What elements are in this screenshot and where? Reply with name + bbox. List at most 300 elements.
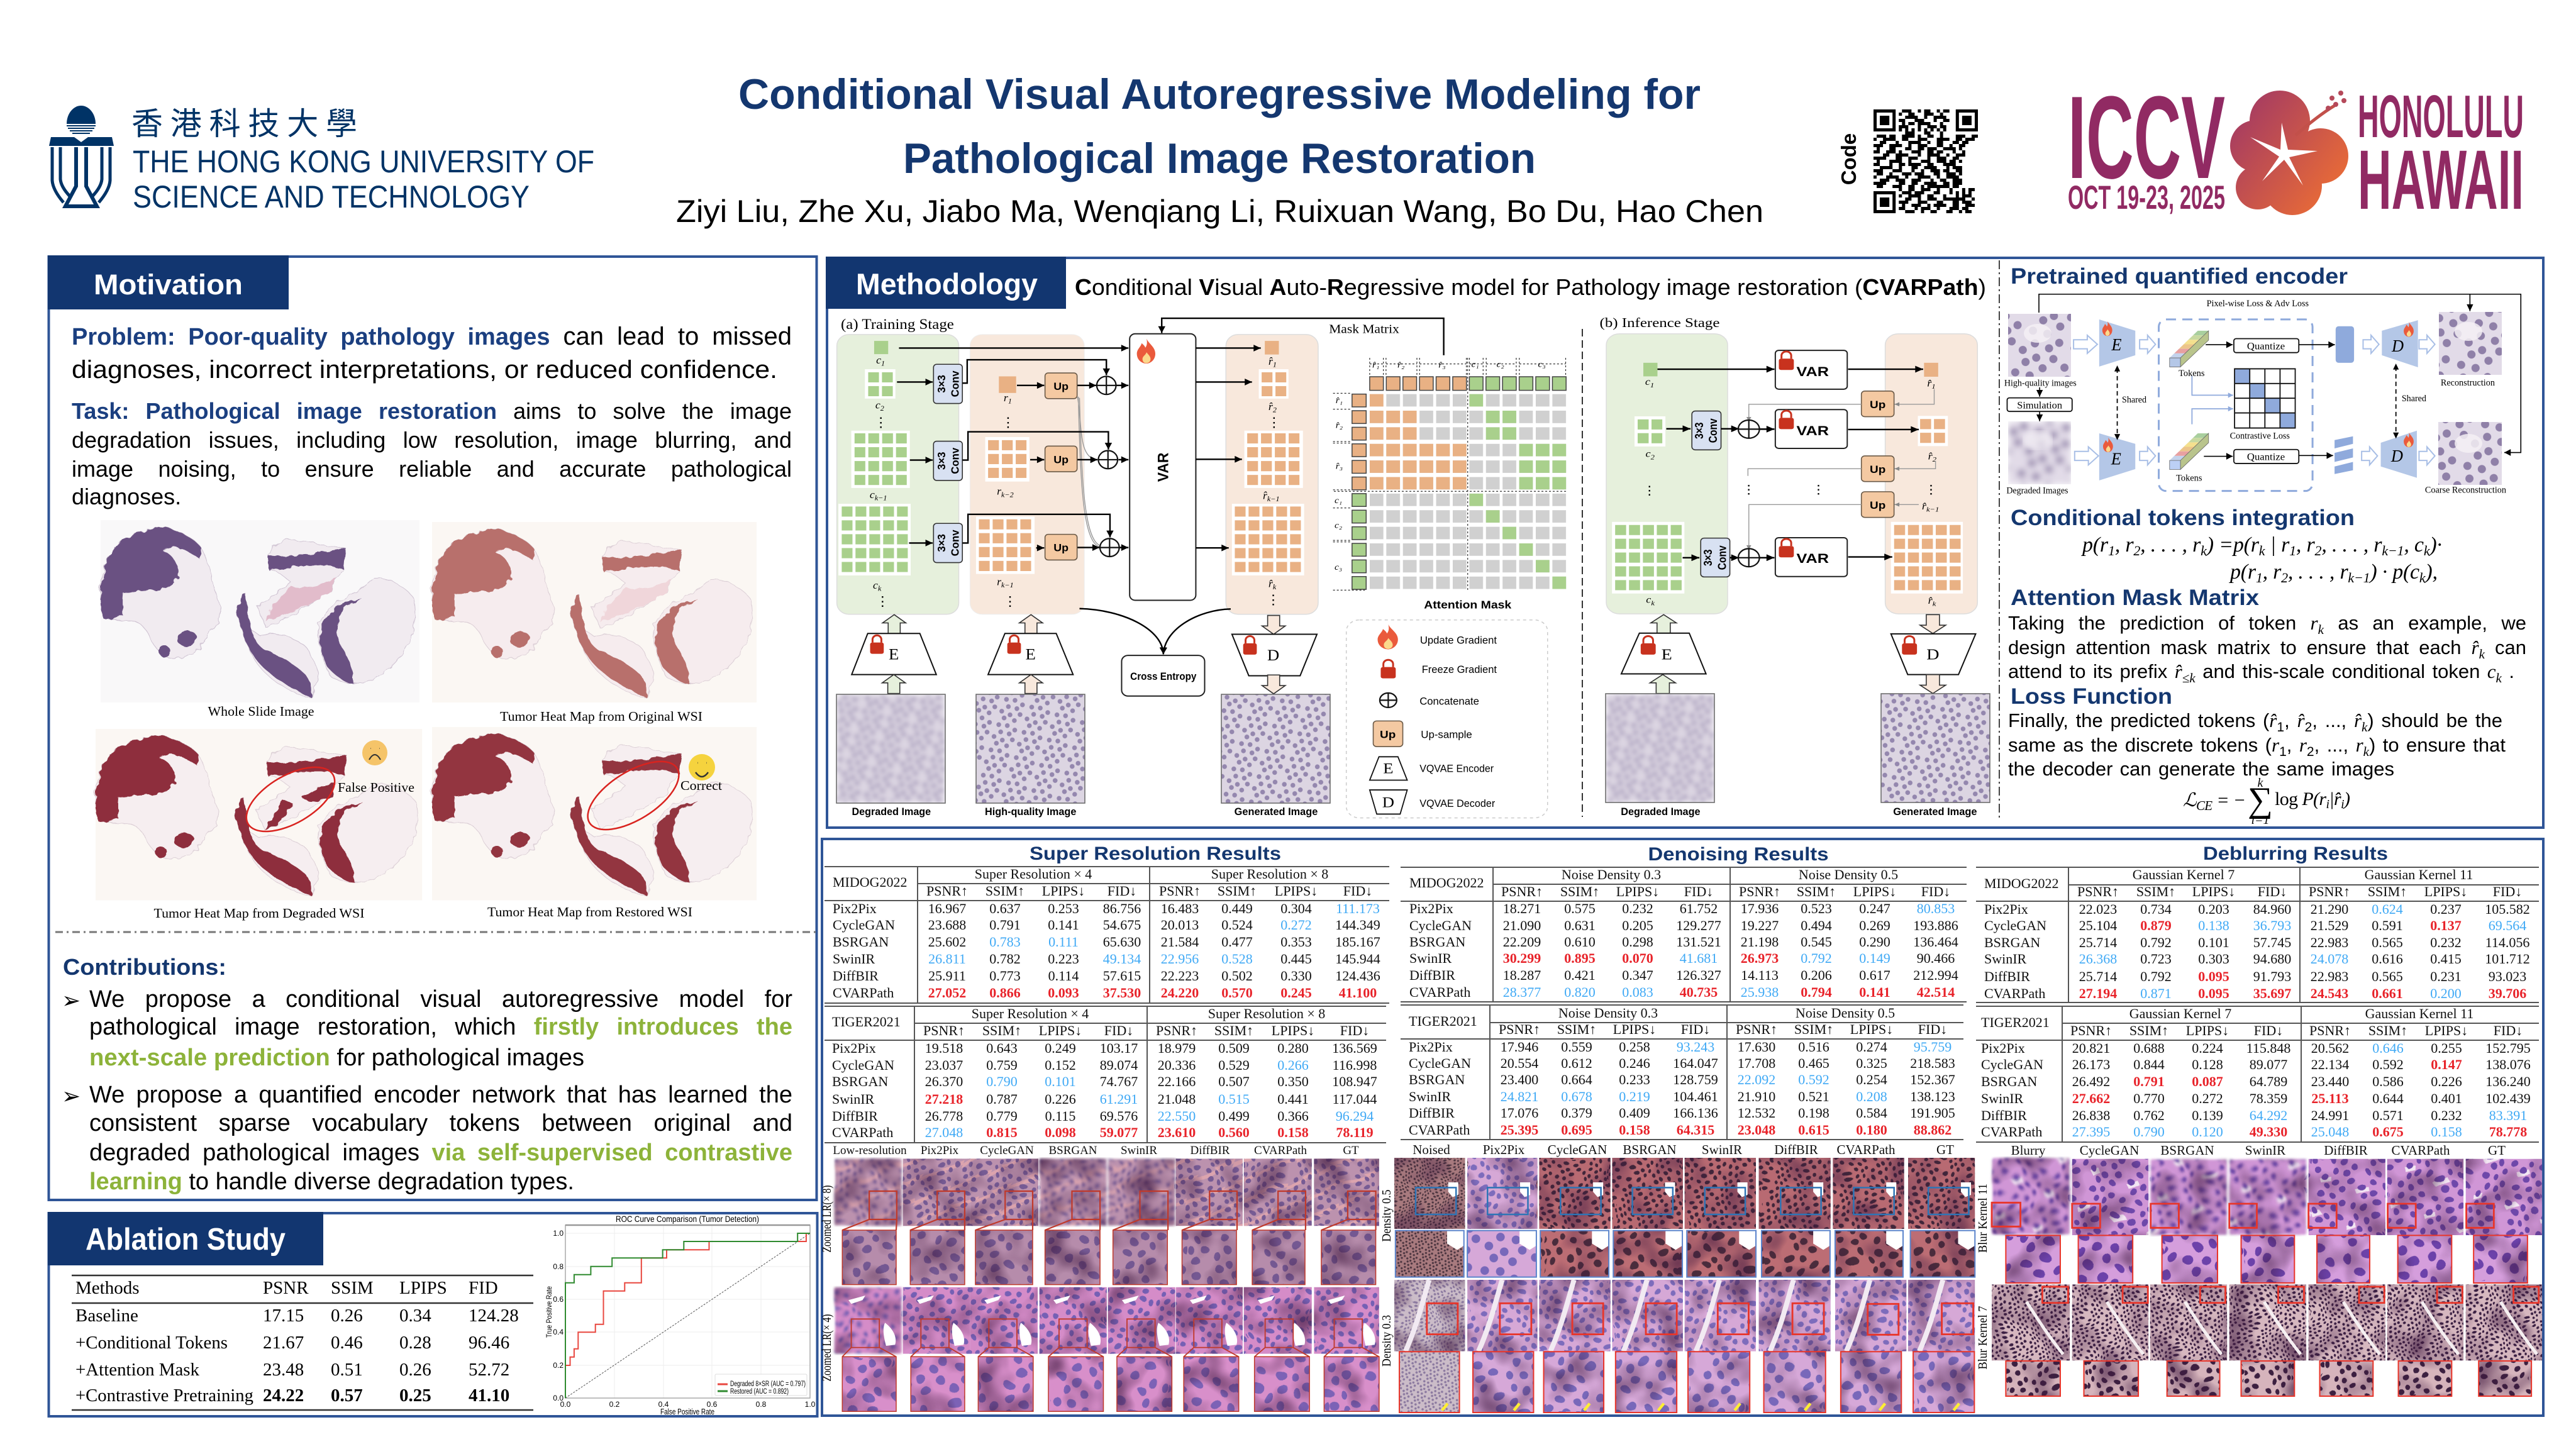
- equation: conditional factorization: 1: [2256, 570, 2263, 586]
- table: SR TIGER2021: BSRGAN: [832, 1074, 888, 1089]
- table: denoising TIGER2021: CVARPath: [1409, 1122, 1470, 1138]
- table: SR MIDOG2022: 25.602: [928, 934, 966, 950]
- diagram: pretrained encoder: Tokens: [2179, 369, 2205, 379]
- table: deblurring MIDOG2022: 36.793: [2253, 918, 2291, 933]
- captions: SR columns: [833, 1144, 1359, 1157]
- matrix cells: c₁: [1472, 360, 1479, 369]
- table: SR TIGER2021: 61.291: [1100, 1091, 1138, 1107]
- table: SR MIDOG2022: 27.052: [928, 985, 966, 1001]
- table: ablation results: LPIPS: [399, 1278, 447, 1298]
- side labels: image rows: Density 0.3: [1380, 1315, 1394, 1367]
- table: ablation results: Baseline: [75, 1306, 138, 1326]
- text: loss explanation: Finally, the predicted tokens (r̂1, r̂2, ..., r̂k) should be the: [2008, 709, 2502, 735]
- table: SR MIDOG2022: 26.811: [928, 951, 966, 967]
- chart: ROC curve comparison: 0.4: [553, 1328, 564, 1336]
- table: denoising MIDOG2022: SwinIR: [1409, 950, 1452, 966]
- table: SR MIDOG2022: SSIM↑: [985, 883, 1024, 899]
- table: SR MIDOG2022: 145.944: [1335, 951, 1380, 967]
- equation: conditional factorization: [2081, 533, 2442, 586]
- table: SR TIGER2021: 0.507: [1218, 1074, 1250, 1089]
- table: SR TIGER2021: 0.266: [1277, 1057, 1309, 1073]
- diagram: pretrained encoder: Pixel-wise Loss & Adv Loss: [2207, 299, 2309, 309]
- diagram: pretrained encoder: High-quality images: [2004, 378, 2077, 389]
- deblurring grid: kernel 7 highlight boxes: [2042, 1287, 2539, 1303]
- text: attention mask explanation: [2008, 611, 2526, 688]
- table: denoising TIGER2021: 0.254: [1856, 1072, 1887, 1087]
- panel: inference predicted tokens: k: [1933, 600, 1936, 608]
- captions: training images: [852, 806, 1318, 818]
- table: denoising MIDOG2022: CycleGAN: [1409, 918, 1472, 933]
- image: encoder high quality: [2008, 314, 2071, 377]
- table: SR MIDOG2022: 41.100: [1339, 985, 1377, 1001]
- table: denoising TIGER2021: 21.910: [1738, 1089, 1775, 1104]
- diagram: training stage: [837, 317, 1444, 818]
- table: deblurring MIDOG2022: 22.983: [2311, 935, 2348, 950]
- table: deblurring TIGER2021: 0.770: [2133, 1091, 2165, 1106]
- text: contribution 1: next-scale prediction for pathological images: [89, 1045, 584, 1071]
- blocks: 3x3 conv: Conv: [948, 370, 962, 397]
- deblurring grid: kernel 7 zoomed crops: [2006, 1361, 2531, 1396]
- panel: predicted tokens: r̂: [1263, 490, 1267, 501]
- panel: inference predicted tokens: r̂: [1922, 501, 1926, 512]
- table: denoising TIGER2021: BSRGAN: [1409, 1072, 1465, 1087]
- table: denoising MIDOG2022: 0.895: [1564, 950, 1596, 966]
- table: denoising TIGER2021: LPIPS↓: [1613, 1021, 1656, 1037]
- captions: denoising columns: DiffBIR: [1774, 1142, 1818, 1157]
- table: denoising TIGER2021: 0.208: [1856, 1089, 1887, 1104]
- table: deblurring TIGER2021: 25.113: [2311, 1091, 2349, 1106]
- matrix cells: r̂₁: [1336, 396, 1343, 406]
- diagram: pretrained encoder: Reconstruction: [2441, 378, 2496, 388]
- block: VAR transformer: VAR: [1155, 453, 1172, 482]
- table: deblurring MIDOG2022: 0.723: [2140, 951, 2172, 967]
- legend: [1346, 620, 1548, 818]
- table: SR MIDOG2022: 49.134: [1103, 951, 1141, 967]
- blocks: 3x3 conv: 3×3: [935, 375, 948, 393]
- table: SR TIGER2021: PSNR↑: [923, 1023, 965, 1038]
- captions: denoising columns: [1413, 1142, 1954, 1157]
- table: SR MIDOG2022: 25.911: [928, 968, 966, 984]
- decoder: [1891, 614, 1975, 694]
- table: deblurring TIGER2021: 25.048: [2311, 1124, 2349, 1140]
- chart: ROC curve comparison: Degraded 8×SR (AUC = 0.797): [730, 1380, 806, 1388]
- table: ablation results: 23.48: [263, 1360, 304, 1380]
- logo: HKUST: [49, 106, 594, 214]
- image grids: [835, 1158, 2542, 1413]
- table: SR MIDOG2022: 22.956: [1161, 951, 1199, 967]
- caption: heat map original: Tumor Heat Map from Original WSI: [500, 709, 702, 724]
- table: ablation results: 52.72: [469, 1360, 509, 1380]
- equation: conditional factorization: , r: [2296, 533, 2316, 557]
- table: denoising TIGER2021: Noise Density 0.3: [1558, 1005, 1658, 1021]
- blocks: up-sample: Up: [1053, 453, 1069, 465]
- table: denoising TIGER2021: FID↓: [1681, 1021, 1710, 1037]
- table: denoising MIDOG2022: 42.514: [1917, 984, 1955, 1000]
- table: denoising TIGER2021: 0.198: [1798, 1105, 1829, 1121]
- latent blocks: [2334, 326, 2354, 474]
- text: contribution 2: degraded pathological images via self-supervised contrastive: [89, 1140, 792, 1166]
- table: ablation results: 41.10: [469, 1385, 509, 1406]
- table: deblurring TIGER2021: SSIM↑: [2129, 1023, 2168, 1038]
- table: SR TIGER2021: 69.576: [1100, 1108, 1138, 1124]
- table: SR TIGER2021: 0.790: [986, 1074, 1018, 1089]
- equation: conditional factorization: , c: [2404, 533, 2424, 557]
- encoder high quality: [988, 614, 1073, 694]
- diagram: training stage: (a) Training Stage: [841, 317, 954, 333]
- equation: conditional factorization: , . . . , r: [2288, 560, 2348, 584]
- table: deblurring MIDOG2022: SSIM↑: [2136, 884, 2175, 899]
- image: coarse reconstruction: [2438, 422, 2502, 485]
- image: tumor heat map degraded: False Positive: [338, 780, 414, 795]
- table: denoising MIDOG2022: SSIM↑: [1797, 884, 1836, 899]
- table: SR MIDOG2022: 0.245: [1280, 985, 1312, 1001]
- table: denoising MIDOG2022: 0.631: [1564, 918, 1596, 933]
- table: SR MIDOG2022: DiffBIR: [833, 968, 879, 984]
- table: SR TIGER2021: 0.226: [1045, 1091, 1076, 1107]
- blocks: up-sample: [1045, 373, 1077, 560]
- block: cross entropy: [1121, 655, 1204, 696]
- table: deblurring MIDOG2022: 0.624: [2372, 901, 2403, 917]
- table: denoising MIDOG2022: 193.886: [1913, 918, 1958, 933]
- table: deblurring MIDOG2022: 57.745: [2253, 935, 2291, 950]
- matrix cells: c₂: [1497, 360, 1504, 369]
- decoders: D: [2391, 336, 2404, 355]
- section: deblurring results: [1976, 843, 2539, 1158]
- table: deblurring MIDOG2022: 0.792: [2140, 969, 2172, 984]
- heading: Ablation Study: Ablation Study: [86, 1223, 286, 1257]
- table: denoising MIDOG2022: 26.973: [1741, 950, 1779, 966]
- captions: SR columns: CycleGAN: [980, 1144, 1034, 1157]
- table: denoising MIDOG2022: 41.681: [1680, 950, 1718, 966]
- table: SR MIDOG2022: 86.756: [1103, 901, 1141, 916]
- side labels: image rows: Zoomed LR(× 4): [820, 1314, 834, 1381]
- table: denoising TIGER2021: PSNR↑: [1499, 1021, 1540, 1037]
- table: deblurring TIGER2021: 0.688: [2133, 1040, 2165, 1056]
- table: ablation results: 0.51: [331, 1360, 363, 1380]
- table: SR TIGER2021: 21.048: [1158, 1091, 1196, 1107]
- table: SR MIDOG2022: 65.630: [1103, 934, 1141, 950]
- table: SR MIDOG2022: 0.253: [1048, 901, 1079, 916]
- panel: inference predicted tokens: r̂: [1928, 451, 1933, 462]
- table: deblurring MIDOG2022: 94.680: [2253, 951, 2291, 967]
- table: deblurring TIGER2021: LPIPS↓: [2186, 1023, 2229, 1038]
- decoders: D: [2390, 446, 2403, 465]
- table: denoising MIDOG2022: 0.290: [1859, 934, 1890, 950]
- denoising grid: density 0.3 highlight boxes and arrows: [1427, 1303, 1974, 1411]
- table: deblurring TIGER2021: 0.762: [2133, 1108, 2165, 1123]
- table: SR TIGER2021: LPIPS↓: [1039, 1023, 1082, 1038]
- table: SR MIDOG2022: 0.330: [1280, 968, 1312, 984]
- table: SR MIDOG2022: 144.349: [1335, 917, 1380, 933]
- table: deblurring MIDOG2022: LPIPS↓: [2424, 884, 2467, 899]
- table: denoising TIGER2021: PSNR↑: [1736, 1021, 1777, 1037]
- table: SR TIGER2021: 0.560: [1218, 1124, 1250, 1140]
- side labels: image rows: Zoomed LR(× 8): [820, 1185, 834, 1253]
- table: SR TIGER2021: 26.370: [925, 1074, 963, 1089]
- equation: conditional factorization: 1: [2289, 543, 2296, 558]
- table: denoising MIDOG2022: MIDOG2022: [1409, 875, 1484, 891]
- caption: attention mask: Attention Mask: [1424, 599, 1512, 611]
- table: SR TIGER2021: 26.778: [925, 1108, 963, 1124]
- panel: Ablation Study: [48, 1212, 818, 1416]
- table: denoising MIDOG2022: 129.277: [1676, 918, 1721, 933]
- equation: cross entropy loss: log P(r: [2275, 789, 2326, 809]
- table: deblurring TIGER2021: 0.571: [2372, 1108, 2404, 1123]
- table: denoising TIGER2021: TIGER2021: [1409, 1013, 1477, 1029]
- table: SR TIGER2021: 89.074: [1100, 1057, 1138, 1073]
- table: SR TIGER2021: 96.294: [1336, 1108, 1374, 1124]
- SR grid: x8 highlight boxes: [842, 1191, 1376, 1230]
- panel: condition tokens: ⋮: [874, 414, 888, 430]
- image: training generated: [1221, 694, 1330, 803]
- table: SR TIGER2021: 0.101: [1045, 1074, 1076, 1089]
- table: SR TIGER2021: 0.249: [1045, 1040, 1076, 1056]
- table: deblurring MIDOG2022: 0.734: [2140, 901, 2172, 917]
- table: denoising MIDOG2022: 17.936: [1741, 901, 1779, 916]
- table: denoising TIGER2021: SSIM↑: [1794, 1021, 1833, 1037]
- table: deblurring TIGER2021: 89.077: [2250, 1057, 2287, 1072]
- heading: super resolution: Super Resolution Results: [1030, 843, 1281, 864]
- captions: deblurring columns: BSRGAN: [2160, 1143, 2214, 1158]
- table: denoising MIDOG2022: 28.377: [1503, 984, 1541, 1000]
- equation: conditional factorization: , . . . , r: [2140, 533, 2201, 557]
- chart: ROC curve comparison: Restored (AUC = 0.892): [730, 1388, 789, 1396]
- table: deblurring MIDOG2022: 0.415: [2430, 951, 2462, 967]
- blocks: inference up-sample: Up: [1870, 464, 1886, 475]
- table: SR TIGER2021: 22.550: [1158, 1108, 1196, 1124]
- table: denoising MIDOG2022: 0.523: [1801, 901, 1832, 916]
- table: denoising TIGER2021: 152.367: [1910, 1072, 1955, 1087]
- table: deblurring MIDOG2022: 0.095: [2198, 985, 2229, 1001]
- table: deblurring MIDOG2022: 101.712: [2485, 951, 2530, 967]
- table: deblurring MIDOG2022: 24.078: [2311, 951, 2348, 967]
- table: SR MIDOG2022: 0.114: [1048, 968, 1079, 984]
- table: deblurring MIDOG2022: 0.137: [2430, 918, 2462, 933]
- panel: inference condition tokens: 2: [1651, 453, 1655, 461]
- table: SR MIDOG2022: 0.093: [1048, 985, 1079, 1001]
- chart: ROC curve comparison: 1.0: [553, 1229, 564, 1238]
- table: deblurring TIGER2021: 83.391: [2489, 1108, 2527, 1123]
- denoising grid: density 0.3 zoomed crops: [1399, 1352, 1974, 1413]
- panel: predicted tokens: ⋮: [1266, 592, 1280, 608]
- legend: Freeze Gradient: [1422, 664, 1497, 675]
- heading: contributions: Contributions:: [63, 954, 226, 980]
- blocks: 3x3 conv: Conv: [948, 447, 962, 474]
- table: deblurring MIDOG2022: CVARPath: [1984, 985, 2045, 1001]
- table: denoising TIGER2021: 138.123: [1910, 1089, 1955, 1104]
- table: SR TIGER2021: 0.509: [1218, 1040, 1250, 1056]
- table: deblurring TIGER2021: 0.120: [2192, 1124, 2223, 1140]
- table: SR MIDOG2022: 185.167: [1335, 934, 1380, 950]
- table: deblurring MIDOG2022: 0.200: [2430, 985, 2462, 1001]
- heading: conditional tokens integration: Conditional tokens integration: [2011, 506, 2355, 530]
- table: ablation results: 24.22: [263, 1385, 304, 1406]
- table: denoising MIDOG2022: 0.205: [1622, 918, 1653, 933]
- table: SR TIGER2021: 27.218: [925, 1091, 963, 1107]
- table: SR MIDOG2022: 16.967: [928, 901, 966, 916]
- table: ablation results: 0.34: [399, 1306, 431, 1326]
- text: contribution 1: [62, 984, 792, 1071]
- blocks: VAR: [1775, 350, 1847, 577]
- table: SR MIDOG2022: FID↓: [1343, 883, 1372, 899]
- table: ablation results: SSIM: [331, 1278, 374, 1298]
- equation: cross entropy loss: CE: [2196, 798, 2212, 813]
- block: cross entropy: Cross Entropy: [1130, 670, 1197, 682]
- text: attention mask explanation: Taking the prediction of token rk as an example, we: [2008, 612, 2526, 637]
- logo: HKUST: 香港科技大學: [131, 106, 357, 142]
- table: denoising TIGER2021: 95.759: [1914, 1039, 1951, 1055]
- table: denoising MIDOG2022: 40.735: [1680, 984, 1718, 1000]
- blocks: up-sample: Up: [1053, 380, 1069, 392]
- captions: SR columns: BSRGAN: [1048, 1144, 1097, 1157]
- table: denoising MIDOG2022: 0.247: [1859, 901, 1890, 916]
- equation: cross entropy loss: ∑: [2248, 780, 2273, 819]
- SR grid: x4 zoomed crops: [842, 1357, 1379, 1411]
- table: SR MIDOG2022: Super Resolution × 4: [975, 866, 1092, 882]
- text: contribution 1: We propose a conditional visual autoregressive model for: [89, 986, 792, 1013]
- table: deblurring MIDOG2022: 0.879: [2140, 918, 2172, 933]
- equation: conditional factorization: , r: [2115, 533, 2134, 557]
- panel: predicted tokens: [1226, 335, 1318, 614]
- captions: deblurring columns: DiffBIR: [2324, 1143, 2368, 1158]
- table: deblurring MIDOG2022: SwinIR: [1984, 951, 2027, 967]
- table: denoising MIDOG2022: 0.269: [1859, 918, 1890, 933]
- chart: ROC curve comparison: 0.2: [609, 1400, 620, 1409]
- captions: SR columns: Low-resolution: [833, 1144, 907, 1157]
- SR grid: x4 highlight boxes: [842, 1319, 1379, 1357]
- block: simulation: [2007, 387, 2072, 421]
- matrix cells: r̂₂: [1397, 361, 1404, 370]
- text: attention mask explanation: attend to its prefix r̂≤k and this-scale conditional token ck .: [2008, 660, 2514, 686]
- legend: VQVAE Decoder: [1419, 797, 1495, 809]
- equation: conditional factorization: )·: [2428, 533, 2442, 557]
- table: deblurring TIGER2021: 0.224: [2192, 1040, 2223, 1056]
- legend: Update Gradient: [1420, 635, 1497, 646]
- table: SR TIGER2021: 117.044: [1333, 1091, 1377, 1107]
- table: SR MIDOG2022: 0.272: [1280, 917, 1312, 933]
- equation: cross entropy loss: i: [2341, 797, 2345, 811]
- table: denoising MIDOG2022: 30.299: [1503, 950, 1541, 966]
- table: SR TIGER2021: 0.152: [1045, 1057, 1076, 1073]
- captions: deblurring columns: SwinIR: [2245, 1143, 2285, 1158]
- table: ablation results: +Contrastive Pretraining: [75, 1385, 253, 1406]
- chart: ROC curve comparison: 0.0: [553, 1394, 564, 1402]
- encoder: E: [1662, 647, 1672, 663]
- table: deblurring TIGER2021: 115.848: [2246, 1040, 2290, 1056]
- logo: ICCV Honolulu Hawaii: ICCV: [2068, 72, 2225, 203]
- side labels: image rows: Blur Kernel 11: [1976, 1184, 1990, 1253]
- table: SR TIGER2021: LPIPS↓: [1272, 1023, 1314, 1038]
- table: ablation results: 96.46: [469, 1333, 509, 1353]
- table: deblurring TIGER2021: 49.330: [2250, 1124, 2287, 1140]
- table: denoising MIDOG2022: 21.090: [1503, 918, 1541, 933]
- table: deblurring TIGER2021: 0.790: [2133, 1124, 2165, 1140]
- blocks: 3x3 conv: 3×3: [935, 452, 948, 470]
- deblurring grid: kernel 11 crops: [1992, 1158, 2542, 1235]
- panel: ground-truth tokens: ⋮: [1001, 414, 1015, 430]
- heading: Motivation: [48, 255, 289, 309]
- table: denoising TIGER2021: 104.461: [1673, 1089, 1718, 1104]
- block: VAR transformer: [1130, 334, 1196, 601]
- panel: ground-truth tokens: k−2: [1001, 491, 1014, 499]
- table: denoising MIDOG2022: 131.521: [1676, 934, 1721, 950]
- panel: predicted tokens: 1: [1273, 361, 1277, 369]
- table: deblurring TIGER2021: SSIM↑: [2368, 1023, 2407, 1038]
- caption: heat map restored: Tumor Heat Map from Restored WSI: [487, 904, 692, 919]
- table: deblurring MIDOG2022: 25.714: [2079, 969, 2117, 984]
- chart: ROC curve comparison: 1.0: [805, 1400, 816, 1409]
- subtitle: Conditional Visual Auto-Regressive model for Pathology image restoration ( CVARPath): [1075, 274, 1986, 300]
- table: SR TIGER2021: Super Resolution × 4: [972, 1006, 1089, 1021]
- chart: ROC curve comparison: 0.4: [658, 1400, 669, 1409]
- panel: inference condition tokens: c: [1646, 448, 1651, 459]
- table: denoising TIGER2021: 0.516: [1798, 1039, 1829, 1055]
- table: deblurring MIDOG2022: PSNR↑: [2077, 884, 2119, 899]
- table: deblurring MIDOG2022: FID↓: [2258, 884, 2287, 899]
- table: deblurring MIDOG2022: MIDOG2022: [1984, 875, 2059, 891]
- table: deblurring MIDOG2022: 0.871: [2140, 985, 2172, 1001]
- table: denoising TIGER2021: 93.243: [1677, 1039, 1714, 1055]
- table: denoising TIGER2021: 164.047: [1673, 1055, 1718, 1071]
- table: deblurring TIGER2021: 0.675: [2372, 1124, 2404, 1140]
- table: SR MIDOG2022: 23.688: [928, 917, 966, 933]
- table: denoising MIDOG2022: 0.794: [1801, 984, 1832, 1000]
- table: denoising TIGER2021: 166.136: [1673, 1105, 1718, 1121]
- table: SR MIDOG2022: 0.502: [1221, 968, 1253, 984]
- table: deblurring TIGER2021: 102.439: [2485, 1091, 2531, 1106]
- table: denoising TIGER2021: 24.821: [1501, 1089, 1538, 1104]
- table: deblurring TIGER2021: CVARPath: [1981, 1124, 2042, 1140]
- equation: conditional factorization: 1: [2108, 543, 2115, 558]
- encoders: E: [2111, 449, 2121, 469]
- table: denoising MIDOG2022: FID↓: [1684, 884, 1713, 899]
- panel: inference predicted tokens: 1: [1931, 383, 1936, 391]
- side labels: image rows: Blur Kernel 7: [1976, 1306, 1990, 1370]
- table: SR MIDOG2022: 24.220: [1161, 985, 1199, 1001]
- captions: deblurring columns: Blurry: [2011, 1143, 2046, 1158]
- equation: conditional factorization: p(r: [2082, 533, 2108, 557]
- table: deblurring MIDOG2022: 114.056: [2485, 935, 2529, 950]
- table: denoising TIGER2021: 23.048: [1738, 1122, 1775, 1138]
- chart: ROC curve comparison: 0.6: [553, 1295, 564, 1304]
- equation: cross entropy loss: ℒ: [2183, 790, 2197, 811]
- table: denoising TIGER2021: 17.630: [1738, 1039, 1775, 1055]
- table: deblurring MIDOG2022: Gaussian Kernel 7: [2133, 867, 2235, 882]
- table: denoising TIGER2021: 0.219: [1619, 1089, 1650, 1104]
- table: denoising MIDOG2022: Pix2Pix: [1409, 901, 1453, 916]
- table: SR TIGER2021: 103.17: [1100, 1040, 1138, 1056]
- equation: conditional factorization: | r: [2265, 533, 2290, 557]
- blocks: 3x3 conv: 3×3: [935, 534, 948, 552]
- equation: conditional factorization: 2: [2133, 543, 2140, 558]
- arrows: inference flow: ⋮: [1811, 483, 1826, 496]
- text: task: diagnoses.: [72, 484, 181, 509]
- table: SR TIGER2021: 0.529: [1218, 1057, 1250, 1073]
- panel: predicted tokens: 2: [1273, 406, 1277, 414]
- table: deblurring TIGER2021: 26.838: [2072, 1108, 2110, 1123]
- image: whole slide image: [100, 520, 419, 702]
- QR code: [1874, 109, 1978, 213]
- table: deblurring TIGER2021: PSNR↑: [2070, 1023, 2112, 1038]
- table: deblurring TIGER2021: 78.778: [2489, 1124, 2527, 1140]
- table: deblurring MIDOG2022: Pix2Pix: [1984, 901, 2028, 917]
- arrows: hollow flow: [2074, 335, 2435, 465]
- text: problem: Problem: Poor-quality pathology images can lead to missed: [72, 323, 792, 350]
- table: deblurring TIGER2021: 0.646: [2372, 1040, 2404, 1056]
- equation: conditional factorization: k−1: [2382, 543, 2404, 558]
- deblurring grid: kernel 11 highlight boxes: [1992, 1202, 2494, 1228]
- table: deblurring MIDOG2022: 0.237: [2430, 901, 2462, 917]
